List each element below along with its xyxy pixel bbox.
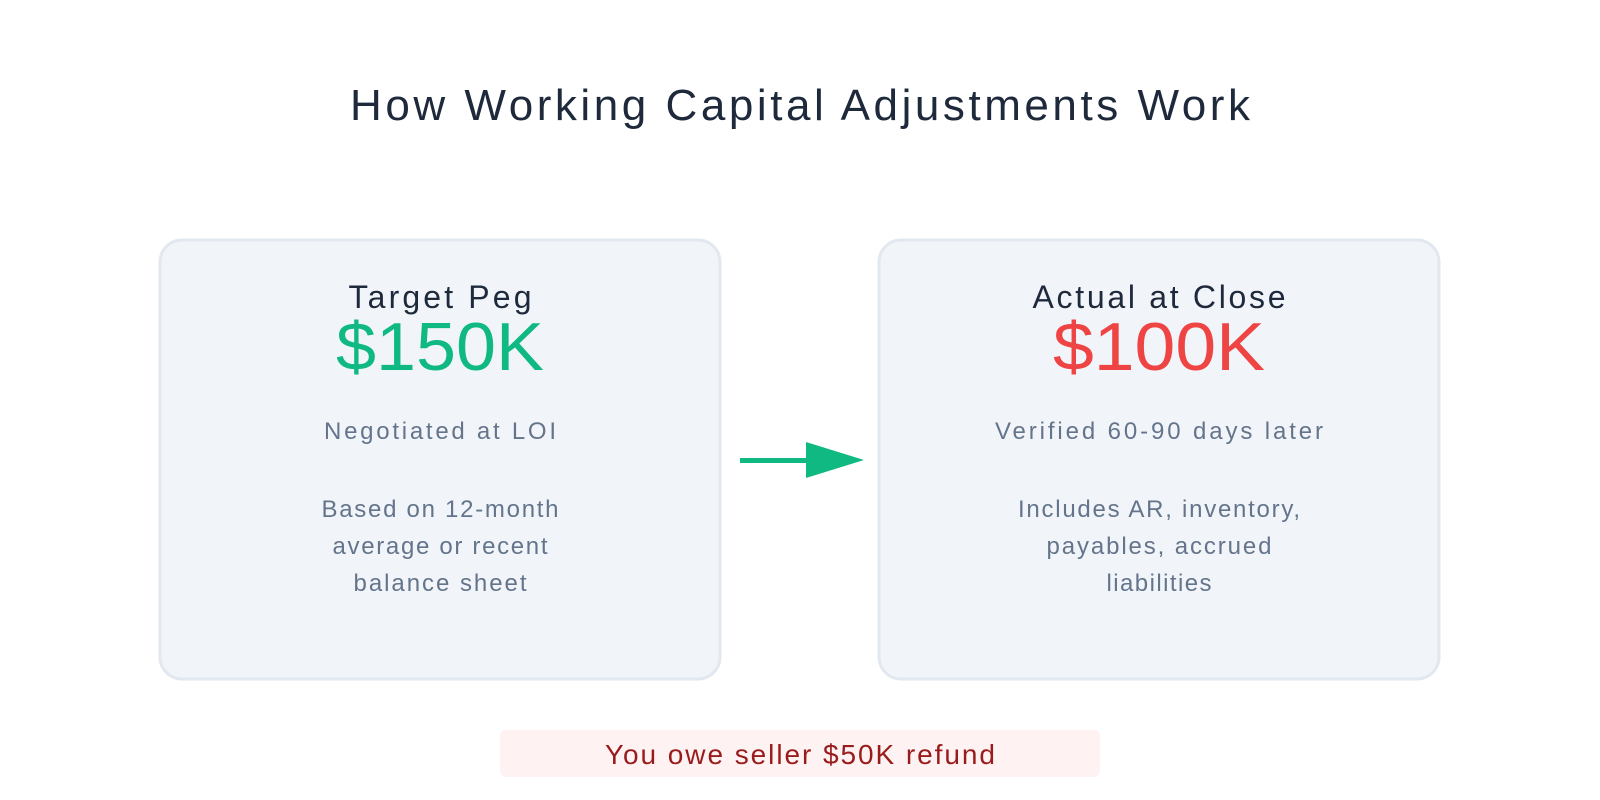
text: includes: liabilities — [1106, 570, 1212, 597]
heading: target peg: Target Peg — [348, 279, 532, 315]
title: How Working Capital Adjustments Work — [350, 81, 1251, 130]
panel: actual at close — [879, 240, 1439, 679]
heading: actual: Actual at Close — [1032, 279, 1286, 315]
arrow — [740, 442, 864, 478]
text: basis: Based on 12-month — [322, 496, 558, 523]
value: 150K: $150K — [336, 309, 544, 385]
text: basis: average or recent — [332, 533, 548, 560]
panel: target peg — [160, 240, 720, 679]
text: verified: Verified 60-90 days later — [995, 418, 1323, 445]
callout: You owe seller $50K refund — [605, 739, 995, 770]
text: basis — [322, 496, 558, 597]
value: 100K: $100K — [1053, 309, 1265, 385]
text: basis: balance sheet — [354, 570, 527, 597]
text: includes — [1018, 496, 1300, 597]
text: negotiated: Negotiated at LOI — [324, 418, 556, 445]
callout — [500, 730, 1100, 777]
text: includes: Includes AR, inventory, — [1018, 496, 1300, 523]
text: includes: payables, accrued — [1046, 533, 1272, 560]
